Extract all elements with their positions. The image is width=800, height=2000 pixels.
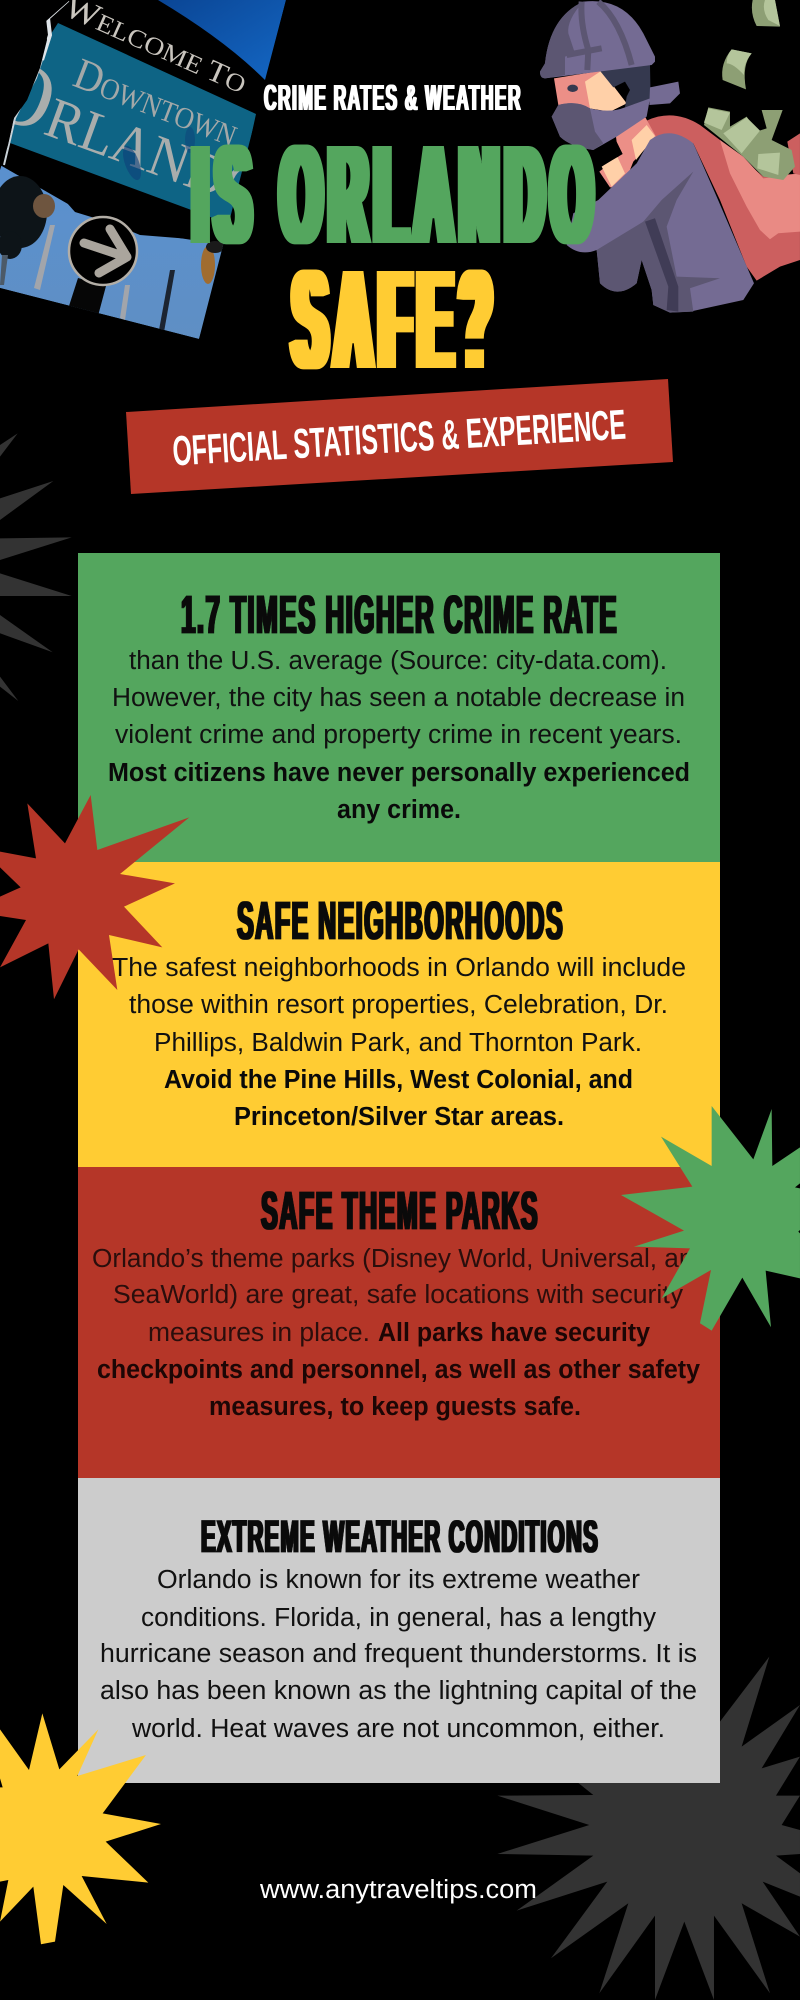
body text: Phillips, Baldwin Park, and Thornton Park. <box>154 1029 642 1057</box>
money in bag <box>704 107 795 180</box>
arrow post <box>69 278 106 316</box>
section text: neighborhoods <box>112 891 686 1131</box>
text: CRIME RATES & WEATHER <box>264 77 522 118</box>
body text: also has been known as the lightning capital of the <box>100 1677 697 1705</box>
sign text: Downtown: DOWNTOWN <box>67 49 246 156</box>
body <box>567 133 754 313</box>
starburst: red <box>0 795 189 999</box>
hat <box>540 1 655 78</box>
body text <box>112 954 686 1131</box>
body text: Princeton/Silver Star areas. <box>234 1103 564 1131</box>
torn paper edge <box>42 0 68 60</box>
body text: measures, to keep guests safe. <box>209 1393 581 1421</box>
body text: The safest neighborhoods in Orlando will include <box>112 954 686 982</box>
face <box>554 71 627 112</box>
neck and hand <box>599 117 656 187</box>
section text: theme parks <box>92 1181 708 1421</box>
sign teal panel <box>10 23 256 225</box>
panel: weather background <box>78 1478 720 1783</box>
body text: All parks have security <box>378 1319 651 1347</box>
body text: SeaWorld) are great, safe locations with security <box>113 1281 683 1309</box>
starburst: dark lower right <box>497 1657 800 2000</box>
body text <box>108 647 690 824</box>
body text: conditions. Florida, in general, has a lengthy <box>141 1604 656 1632</box>
body text: those within resort properties, Celebration, Dr. <box>129 991 668 1019</box>
body text: violent crime and property crime in recent years. <box>115 721 682 749</box>
photo: Welcome to Downtown Orlando sign <box>0 0 290 345</box>
body text: Orlando is known for its extreme weather <box>157 1566 641 1594</box>
black gap <box>593 138 623 168</box>
panel: neighborhoods background <box>78 862 720 1167</box>
section text: weather <box>100 1511 697 1743</box>
section text: crime rate <box>108 585 690 824</box>
body text <box>100 1566 697 1743</box>
body text: measures in place. <box>148 1319 370 1347</box>
mask <box>552 98 650 150</box>
panel: theme parks background <box>78 1167 720 1478</box>
body text: checkpoints and personnel, as well as other safety <box>97 1356 701 1384</box>
starburst: dark upper left <box>0 433 72 701</box>
footer url: www.anytraveltips.com <box>259 1876 537 1904</box>
body text <box>92 1245 708 1421</box>
panel: crime rate background <box>78 553 720 862</box>
bag <box>647 115 800 281</box>
body text: Most citizens have never personally experienced <box>108 759 690 787</box>
falling bills <box>752 0 780 27</box>
body text: any crime. <box>337 796 461 824</box>
palm foliage <box>0 176 224 332</box>
body text: Avoid the Pine Hills, West Colonial, and <box>164 1066 633 1094</box>
body text: hurricane season and frequent thunderstorms. It is <box>100 1640 697 1668</box>
ribbon: official statistics and experience <box>126 379 673 494</box>
arrow sign <box>69 217 137 285</box>
starburst: yellow <box>0 1713 161 1944</box>
body text: Orlando’s theme parks (Disney World, Universal, and <box>92 1245 708 1273</box>
starburst: green <box>621 1106 800 1331</box>
body text: world. Heat waves are not uncommon, either. <box>131 1715 665 1743</box>
body text: However, the city has seen a notable decrease in <box>112 684 685 712</box>
illustration: thief with money bag <box>540 0 800 313</box>
body text: than the U.S. average (Source: city-data.com). <box>129 647 667 675</box>
